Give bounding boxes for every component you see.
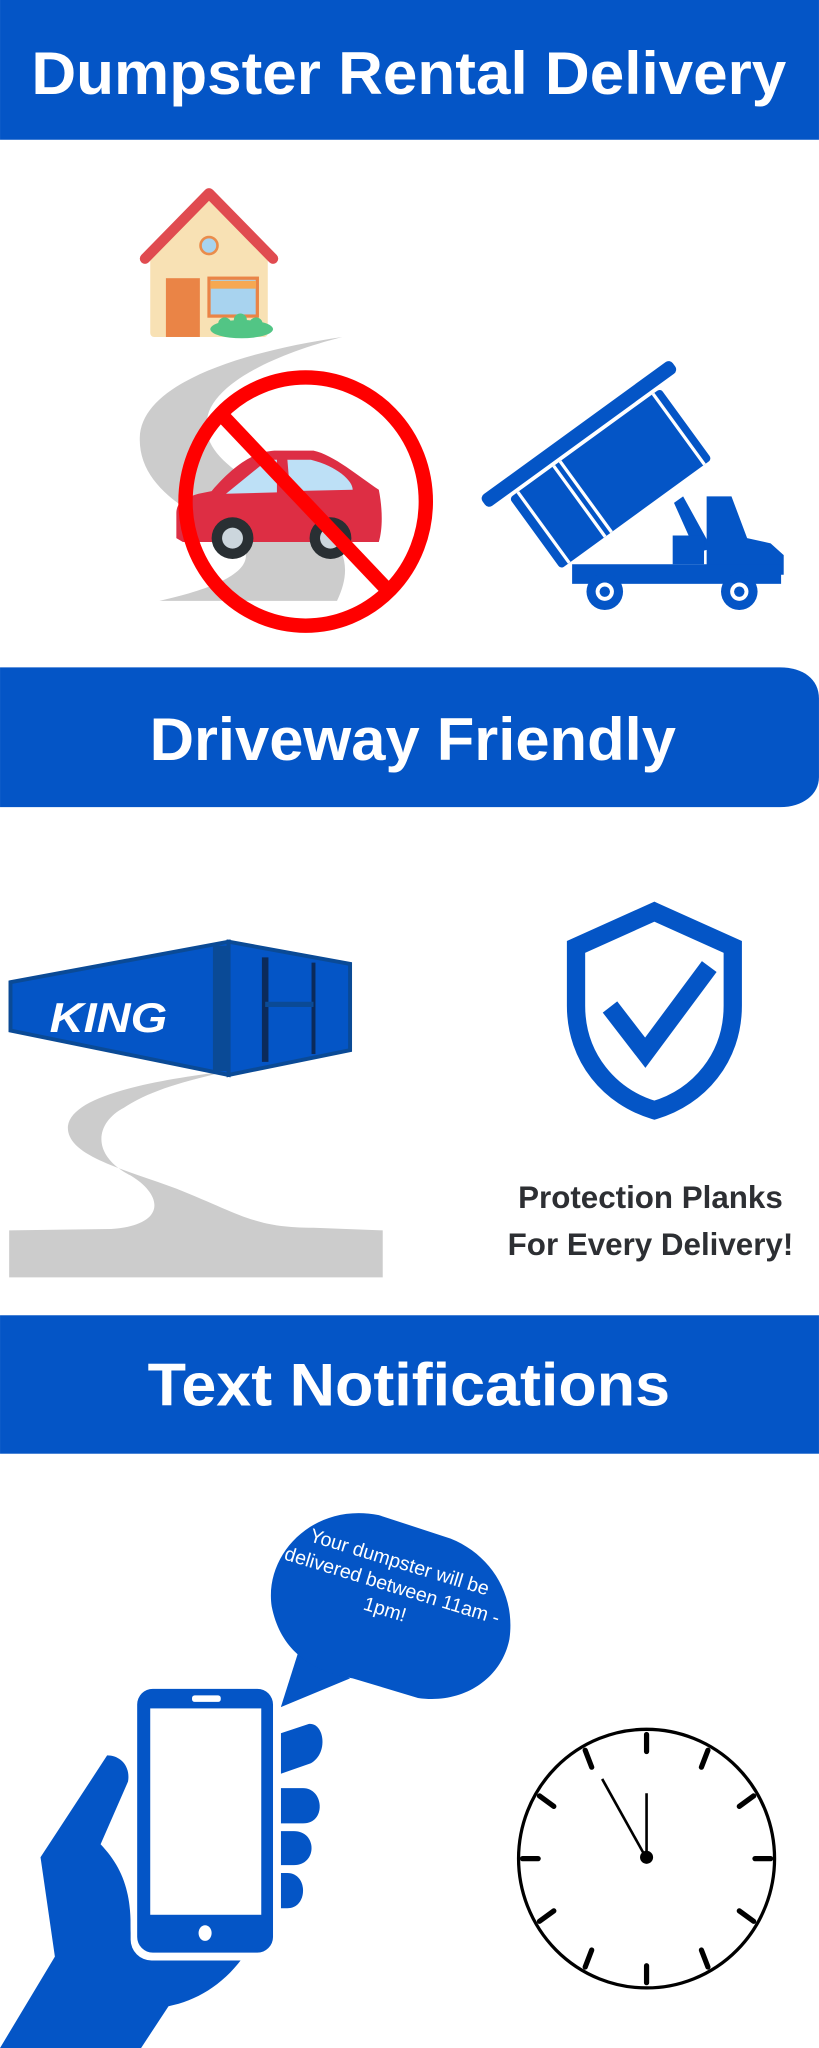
road: winding driveway top — [140, 337, 345, 601]
header: Dumpster Rental Delivery: Dumpster Rental Delivery — [31, 40, 787, 107]
icon: KING dumpster — [10, 942, 350, 1075]
header: Driveway Friendly: Driveway Friendly — [150, 706, 677, 773]
callout: speech bubble: 1pm! — [361, 1593, 409, 1627]
callout: speech bubble: delivered between 11am - — [282, 1543, 502, 1629]
icon: house — [145, 193, 273, 338]
road: winding driveway middle — [9, 1071, 383, 1277]
icon: clock — [519, 1729, 775, 1988]
icon: prohibition sign — [186, 377, 426, 626]
icon: shield with check — [576, 912, 733, 1110]
callout: speech bubble: Your dumpster will be — [307, 1525, 492, 1600]
icon: KING dumpster: KING — [50, 994, 167, 1041]
icon: dump truck — [480, 359, 784, 610]
icon: hand holding phone — [0, 1681, 322, 2048]
header: Driveway Friendly — [0, 667, 819, 807]
icon: red car — [176, 451, 382, 559]
callout: speech bubble — [271, 1513, 510, 1707]
header: Text Notifications — [0, 1315, 819, 1454]
text: protection planks: For Every Delivery! — [508, 1227, 793, 1262]
header: Dumpster Rental Delivery — [0, 0, 819, 140]
text: protection planks: Protection Planks — [518, 1180, 783, 1215]
text: protection planks — [508, 1180, 793, 1262]
header: Text Notifications: Text Notifications — [148, 1351, 670, 1418]
